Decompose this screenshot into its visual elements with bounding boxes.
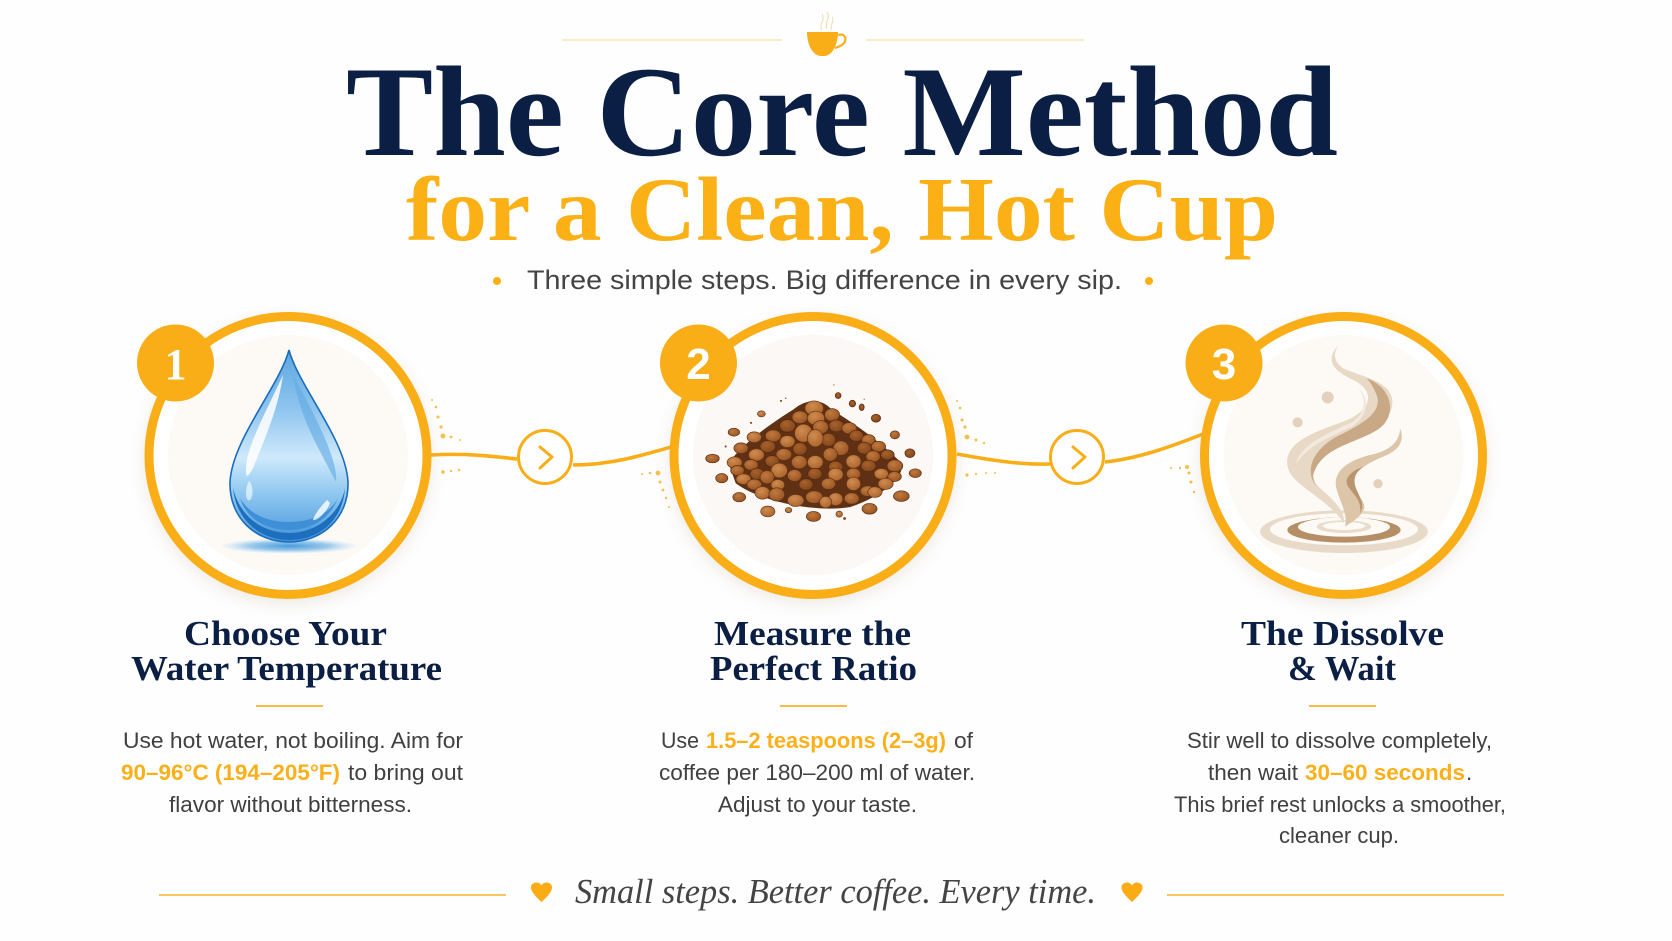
panel: step 1 water [137,316,429,602]
body: step 1: 90–96°C (194–205°F) [121,760,340,785]
step 3 ring [1204,316,1482,594]
connector: step 2 to step 3 [956,400,1203,493]
heading: step 2 [710,614,917,688]
badge 2: 2 [686,340,711,389]
badge 1: 1 [164,340,186,389]
heading: step 1: Water Temperature [131,649,442,688]
body: step 3 [1174,728,1506,848]
step 2 ring [674,316,952,594]
body: step 3: This brief rest unlocks a smoother, [1174,792,1506,817]
body: step 1: Use hot water, not boiling. Aim for [123,728,464,753]
icon: coffee pile [706,384,921,521]
tagline: Three simple steps. Big difference in every sip. [527,265,1122,295]
heading: step 3: The Dissolve [1241,614,1444,653]
icon: left heart [531,882,552,902]
text block: step 3 [1174,614,1506,848]
heading: step 1 [131,614,442,688]
body: step 2: coffee per 180–200 ml of water. [659,760,975,785]
closing line: Small steps. Better coffee. Every time. [575,872,1096,911]
body: step 3: 30–60 seconds [1305,760,1465,785]
heading: step 3: & Wait [1288,649,1396,688]
panel: step 2 coffee [660,316,954,602]
icon: right heart [1122,882,1142,902]
panel: step 3 dissolve [1186,316,1484,602]
icon: steam swirl [1260,345,1428,553]
heading: step 3 [1241,614,1444,688]
text block: step 1 [121,614,464,817]
body: step 2: Adjust to your taste. [718,792,917,817]
body: step 2: Use [661,728,699,753]
footer tagline [159,872,1504,911]
heading: step 1: Choose Your [184,614,387,653]
title: The Core Method [346,40,1338,183]
heading: step 2: Measure the [714,614,911,653]
text block: step 2 [659,614,975,817]
icon: water drop [222,350,356,554]
badge 3 [1186,324,1262,402]
body: step 1 [121,728,464,817]
body: step 3: then wait [1208,760,1299,785]
header ornament: coffee cup with rules [562,12,1084,56]
body: step 3: . [1466,760,1472,785]
heading: step 2: Perfect Ratio [710,649,917,688]
badge 1 [137,324,214,402]
subtitle heading: for a Clean, Hot Cup [406,159,1278,260]
badge 3: 3 [1212,340,1236,389]
connector: step 1 to step 2 [431,399,671,508]
body: step 1: to bring out [348,760,464,785]
body: step 1: flavor without bitterness. [169,792,412,817]
body: step 2 [659,728,975,817]
body: step 3: cleaner cup. [1279,823,1399,848]
body: step 3: Stir well to dissolve completely, [1187,728,1492,753]
badge 2 [660,324,737,402]
step 1 ring [149,316,427,594]
body: step 2: of [954,728,974,753]
body: step 2: 1.5–2 teaspoons (2–3g) [706,728,946,753]
